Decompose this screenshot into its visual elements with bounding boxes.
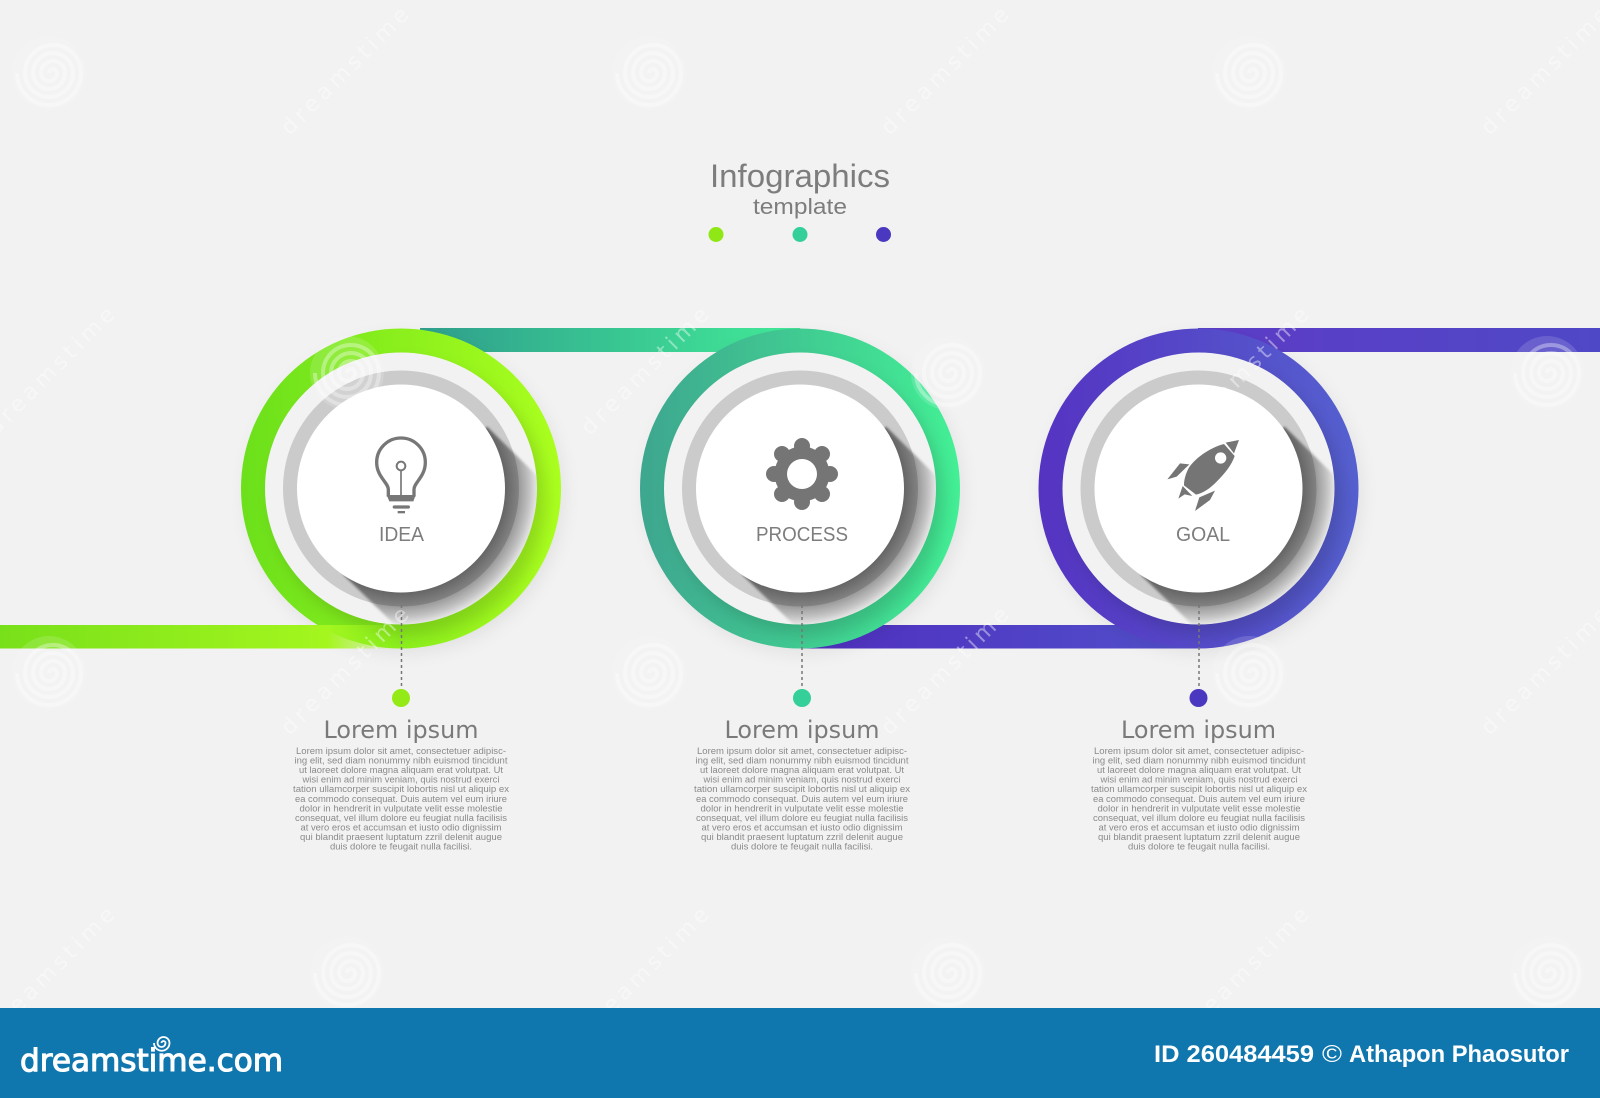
text block: goal: ea commodo consequat. Duis autem vel eum iriure	[1093, 794, 1305, 805]
connector: process dotted line and dot	[793, 605, 811, 707]
text block: process: ut laoreet dolore magna aliquam erat volutpat. Ut	[700, 765, 904, 776]
watermark layer: dreamstime	[576, 902, 714, 1040]
footer credit: Athapon Phaosutor	[1349, 1041, 1569, 1068]
text block: idea: wisi enim ad minim veniam, quis nostrud exerci	[302, 775, 500, 786]
text block: process: wisi enim ad minim veniam, quis nostrud exerci	[703, 775, 900, 786]
entry band: left	[0, 625, 400, 648]
heading: goal: Lorem ipsum	[1121, 716, 1276, 744]
text block: process: qui blandit praesent luptatum zzril delenit augue	[701, 832, 903, 843]
text block: idea: qui blandit praesent luptatum zzril delenit augue	[300, 832, 502, 843]
text block: process: dolor in hendrerit in vulputate velit esse molestie	[700, 803, 904, 814]
text block: process: ing elit, sed diam nonummy nibh euismod tincidunt	[696, 756, 909, 766]
panel: process circle	[640, 328, 962, 653]
connector band: step 1 to step 2	[420, 328, 800, 352]
watermark layer: dreamstime	[576, 302, 714, 440]
text block: goal: wisi enim ad minim veniam, quis nostrud exerci	[1100, 775, 1298, 786]
text block: idea	[293, 746, 509, 852]
watermark layer: dreamstime	[276, 2, 414, 140]
text block: process: ea commodo consequat. Duis autem vel eum iriure	[696, 794, 908, 805]
connector: goal dotted line and dot	[1190, 605, 1208, 707]
watermark layer: dreamstime	[876, 2, 1014, 140]
watermark layer: dreamstime	[1176, 902, 1314, 1040]
text block: idea: ea commodo consequat. Duis autem vel eum iriure	[295, 794, 507, 805]
text block: goal: tation ullamcorper suscipit lobortis nisl ut aliquip ex	[1091, 784, 1307, 795]
text block: idea: dolor in hendrerit in vulputate velit esse molestie	[300, 803, 502, 814]
text block: process: consequat, vel illum dolore eu feugiat nulla facilisis	[696, 813, 908, 824]
text block: goal: duis dolore te feugait nulla facilisi.	[1128, 842, 1270, 852]
text block: goal	[1091, 746, 1307, 852]
footer credit: ID 260484459	[1154, 1041, 1314, 1068]
text block: goal: consequat, vel illum dolore eu feugiat nulla facilisis	[1093, 813, 1305, 824]
footer bar	[0, 1008, 1600, 1098]
connector: idea dotted line and dot	[392, 605, 410, 707]
label: GOAL: GOAL	[1176, 523, 1230, 546]
text block: goal: ing elit, sed diam nonummy nibh euismod tincidunt	[1092, 756, 1306, 766]
heading: idea: Lorem ipsum	[324, 716, 478, 744]
text block: goal: dolor in hendrerit in vulputate velit esse molestie	[1098, 803, 1300, 814]
text block: process	[694, 746, 910, 852]
panel: idea circle	[241, 328, 564, 653]
footer logo: dreamstime.com	[20, 1043, 283, 1079]
watermark layer: dreamstime	[276, 602, 414, 740]
footer credit	[1154, 1041, 1569, 1068]
text block: goal: qui blandit praesent luptatum zzril delenit augue	[1098, 832, 1300, 843]
heading: process: Lorem ipsum	[724, 716, 880, 744]
subtitle: template	[753, 194, 847, 219]
icon: light bulb	[377, 438, 425, 513]
text block: idea: Lorem ipsum dolor sit amet, consectetuer adipisc-	[296, 746, 506, 757]
text block: idea: ing elit, sed diam nonummy nibh euismod tincidunt	[294, 756, 508, 766]
text block: goal: at vero eros et accumsan et iusto odio dignissim	[1098, 823, 1300, 834]
text block: idea: at vero eros et accumsan et iusto odio dignissim	[300, 823, 502, 834]
panel: goal circle	[1038, 328, 1361, 653]
text block: idea: consequat, vel illum dolore eu feugiat nulla facilisis	[295, 813, 507, 824]
watermark layer: dreamstime	[1176, 302, 1314, 440]
text block: idea: tation ullamcorper suscipit lobortis nisl ut aliquip ex	[293, 784, 509, 795]
text block: goal: Lorem ipsum dolor sit amet, consectetuer adipisc-	[1094, 746, 1304, 757]
watermark layer: dreamstime	[876, 602, 1014, 740]
title dots	[708, 227, 891, 242]
footer credit: ©	[1322, 1041, 1342, 1068]
text block: process: Lorem ipsum dolor sit amet, consectetuer adipisc-	[697, 746, 907, 757]
title: Infographics	[710, 158, 890, 194]
text block: process: tation ullamcorper suscipit lobortis nisl ut aliquip ex	[694, 784, 910, 795]
text block: process: duis dolore te feugait nulla facilisi.	[731, 842, 873, 852]
text block: process: at vero eros et accumsan et iusto odio dignissim	[702, 823, 902, 834]
label: PROCESS: PROCESS	[756, 523, 848, 546]
text block: idea: ut laoreet dolore magna aliquam erat volutpat. Ut	[299, 765, 503, 776]
connector band: step 2 to step 3	[800, 625, 1200, 648]
text block: goal: ut laoreet dolore magna aliquam erat volutpat. Ut	[1097, 765, 1301, 776]
icon: gear	[766, 438, 838, 510]
exit band: right	[1198, 328, 1600, 352]
icon: rocket	[1167, 440, 1239, 511]
text block: idea: duis dolore te feugait nulla facilisi.	[330, 842, 472, 852]
label: IDEA: IDEA	[379, 523, 424, 546]
